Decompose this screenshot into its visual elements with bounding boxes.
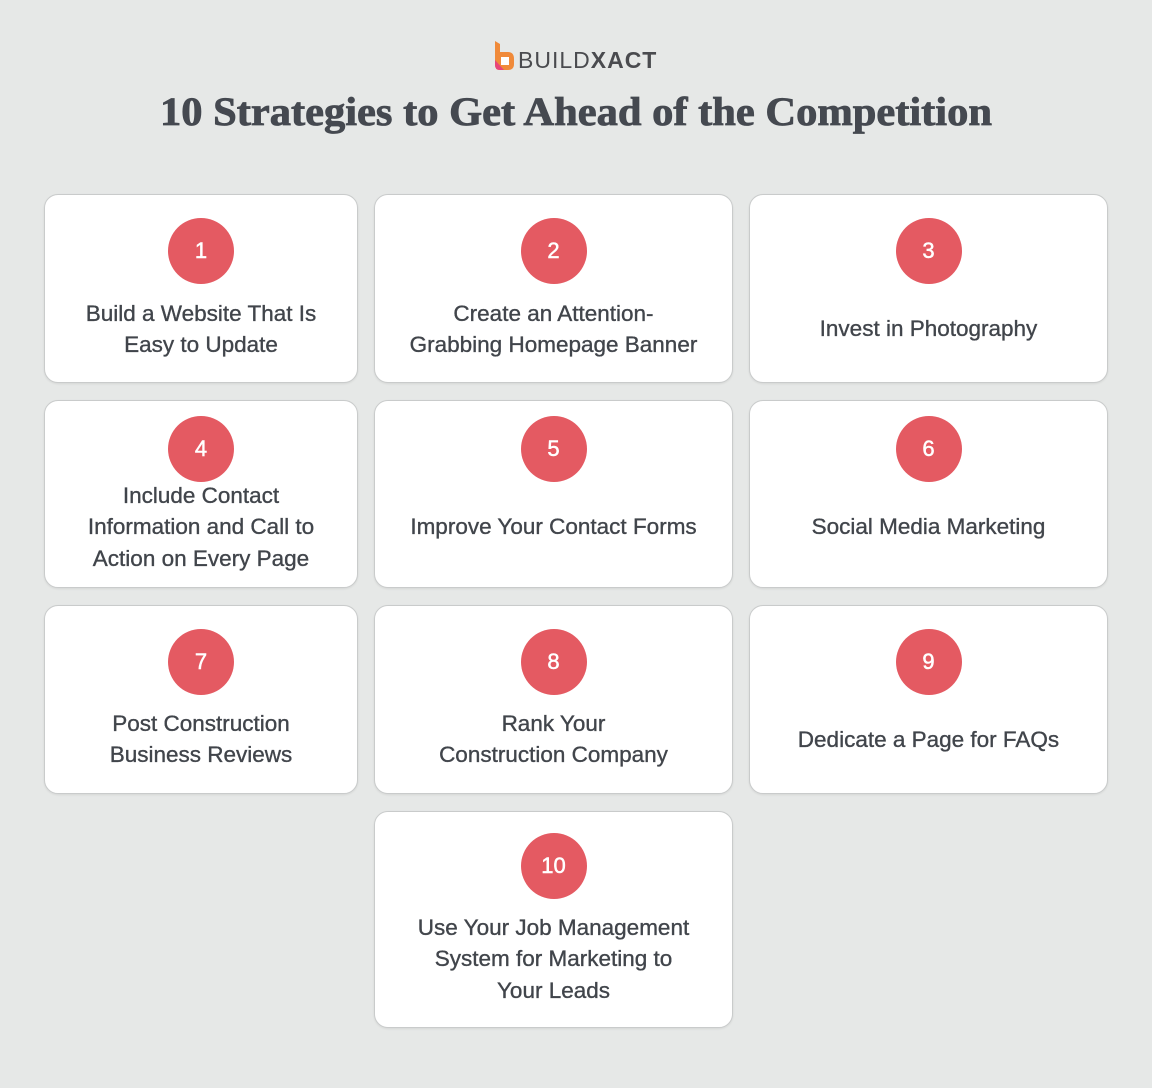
- logo text: BUILDXACT: [518, 47, 657, 73]
- card 4: Include Contact: [123, 483, 279, 508]
- card 1: Build a Website That Is: [86, 300, 316, 326]
- card 2: Grabbing Homepage Banner: [410, 332, 697, 357]
- card 8: 8: [547, 649, 560, 674]
- card 6: Social Media Marketing: [812, 514, 1045, 539]
- card 10: System for Marketing to: [435, 946, 672, 971]
- card 4: 4: [195, 436, 207, 461]
- card 10: 10: [541, 853, 566, 878]
- title: 10 Strategies to Get Ahead of the Competition: [160, 89, 992, 134]
- card 1: Easy to Update: [124, 332, 278, 357]
- card 6: 6: [922, 436, 935, 461]
- card 6: [749, 400, 1108, 588]
- card 7: [44, 605, 358, 794]
- card 8: [374, 605, 733, 794]
- card 5: 5: [547, 436, 560, 461]
- card 2: 2: [547, 238, 560, 263]
- card 7: 7: [195, 649, 207, 674]
- card 8: Construction Company: [439, 742, 668, 767]
- card 7: Business Reviews: [110, 742, 292, 767]
- card 3: Invest in Photography: [820, 316, 1037, 341]
- card 4: [44, 400, 358, 588]
- card 4: Action on Every Page: [93, 546, 309, 571]
- card 7: Post Construction: [112, 710, 290, 736]
- card 10: [374, 811, 733, 1028]
- card 5: Improve Your Contact Forms: [410, 514, 697, 539]
- card 2: [374, 194, 733, 383]
- card 9: 9: [922, 649, 935, 674]
- card 4: Information and Call to: [88, 514, 314, 539]
- card 10: Use Your Job Management: [418, 915, 689, 940]
- card 5: [374, 400, 733, 588]
- card 1: 1: [195, 238, 207, 263]
- icon: logo mark: [495, 41, 514, 70]
- card 9: Dedicate a Page for FAQs: [798, 727, 1059, 752]
- card 8: Rank Your: [502, 710, 605, 736]
- card 10: Your Leads: [497, 978, 610, 1003]
- card 3: [749, 194, 1108, 383]
- card 9: [749, 605, 1108, 794]
- logo: [495, 41, 657, 73]
- card 3: 3: [922, 238, 935, 263]
- card 1: [44, 194, 358, 383]
- card 2: Create an Attention-: [453, 300, 654, 326]
